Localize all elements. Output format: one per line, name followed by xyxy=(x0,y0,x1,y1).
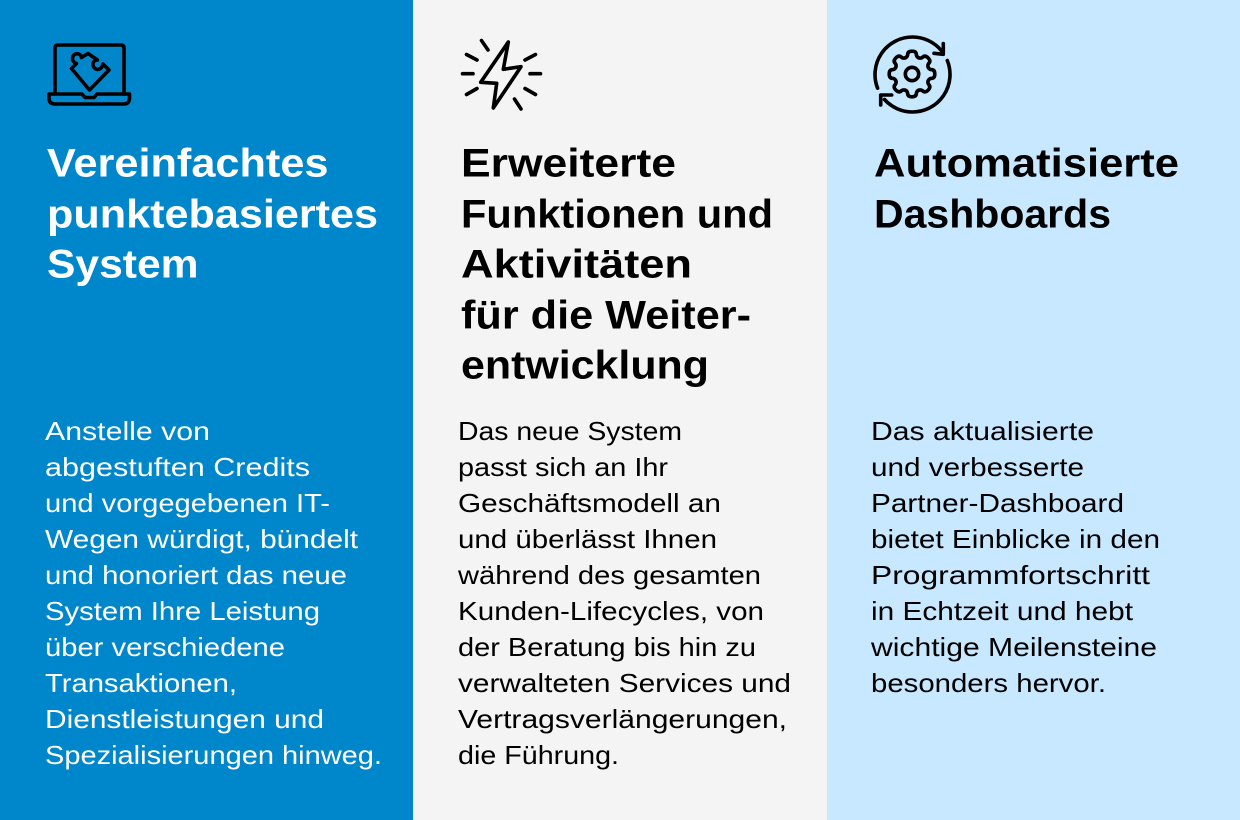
heading: simplified points system: punktebasiertes xyxy=(47,192,378,236)
body text: advanced features and activities: Vertragsverlängerungen, xyxy=(458,704,787,734)
body text: simplified points system: über verschiedene xyxy=(45,632,285,662)
body text: automated dashboards: Das aktualisierte xyxy=(871,416,1094,446)
body text: advanced features and activities: die Führung. xyxy=(458,740,619,770)
body text: simplified points system: Transaktionen, xyxy=(45,668,237,698)
body text: simplified points system: Wegen würdigt, bündelt xyxy=(45,524,359,554)
heading: simplified points system: Vereinfachtes xyxy=(47,142,328,186)
body text: simplified points system: und honoriert das neue xyxy=(45,560,347,590)
heading: advanced features and activities: Aktivitäten xyxy=(461,242,692,286)
panel: advanced features and activities xyxy=(413,0,827,820)
body text: simplified points system: Spezialisierungen hinweg. xyxy=(45,740,382,770)
body text: simplified points system: Dienstleistungen und xyxy=(45,704,324,734)
body text: automated dashboards: Programmfortschritt xyxy=(871,560,1151,590)
body text: automated dashboards: und verbesserte xyxy=(871,452,1084,482)
body text: automated dashboards xyxy=(870,416,1160,698)
heading: advanced features and activities: für die Weiter- xyxy=(461,294,751,338)
body text: advanced features and activities: passt sich an Ihr xyxy=(458,452,668,482)
heading: automated dashboards: Automatisierte xyxy=(874,142,1179,186)
body text: advanced features and activities: während des gesamten xyxy=(457,560,761,590)
heading: automated dashboards: Dashboards xyxy=(874,192,1111,236)
body text: advanced features and activities: der Beratung bis hin zu xyxy=(458,632,756,662)
heading: advanced features and activities xyxy=(461,142,773,388)
body text: simplified points system: abgestuften Credits xyxy=(45,452,310,482)
body text: advanced features and activities xyxy=(457,416,791,770)
body text: simplified points system: Anstelle von xyxy=(45,416,210,446)
body text: automated dashboards: bietet Einblicke in den xyxy=(871,524,1160,554)
heading: simplified points system xyxy=(47,142,378,286)
body text: advanced features and activities: verwalteten Services und xyxy=(458,668,791,698)
body text: simplified points system: und vorgegebenen IT- xyxy=(45,488,330,518)
icon: lightning bolt with rays xyxy=(462,40,540,109)
panel: automated dashboards xyxy=(827,0,1240,820)
body text: advanced features and activities: und überlässt Ihnen xyxy=(458,524,717,554)
heading: automated dashboards xyxy=(874,142,1179,236)
icon: laptop with puzzle piece xyxy=(49,45,130,104)
body text: advanced features and activities: Das neue System xyxy=(458,416,682,446)
heading: advanced features and activities: entwicklung xyxy=(461,344,709,388)
heading: simplified points system: System xyxy=(47,242,198,286)
body text: simplified points system xyxy=(45,416,382,770)
heading: advanced features and activities: Funktionen und xyxy=(461,192,773,236)
body text: simplified points system: System Ihre Leistung xyxy=(45,596,320,626)
body text: advanced features and activities: Kunden-Lifecycles, von xyxy=(458,596,764,626)
body text: advanced features and activities: Geschäftsmodell an xyxy=(458,488,721,518)
body text: automated dashboards: Partner-Dashboard xyxy=(871,488,1124,518)
body text: automated dashboards: wichtige Meilensteine xyxy=(870,632,1157,662)
icon: gear with circular arrows xyxy=(875,37,950,112)
panel: simplified points system xyxy=(0,0,413,820)
body text: automated dashboards: in Echtzeit und hebt xyxy=(871,596,1134,626)
heading: advanced features and activities: Erweiterte xyxy=(461,142,676,186)
body text: automated dashboards: besonders hervor. xyxy=(871,668,1106,698)
